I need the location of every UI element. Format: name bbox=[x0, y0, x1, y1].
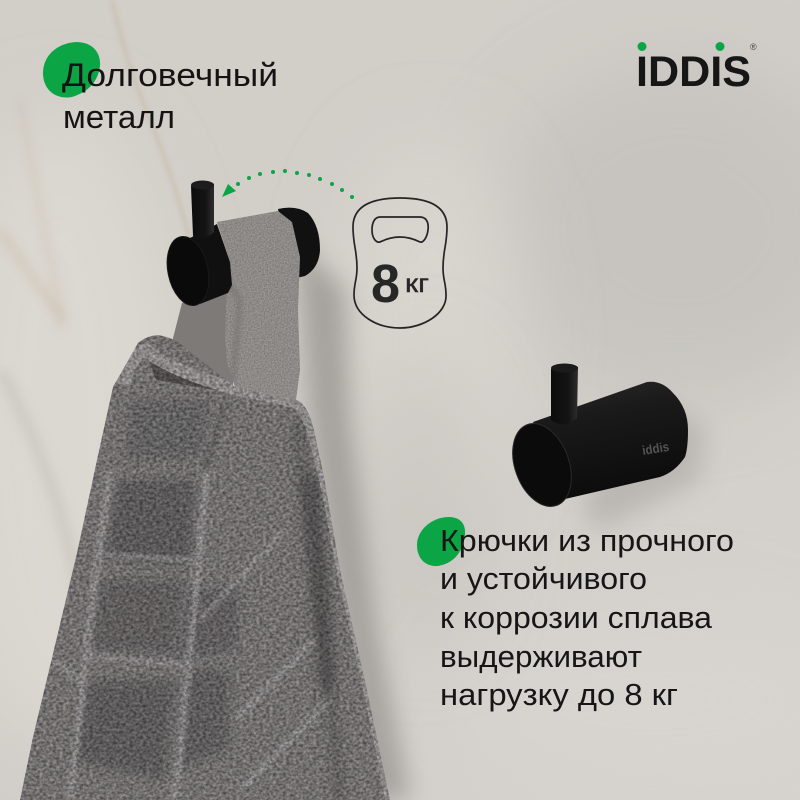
green blob: description bbox=[417, 517, 465, 566]
heading: Долговечный bbox=[62, 57, 278, 93]
hook 2: front disc bbox=[502, 415, 582, 515]
description text bbox=[440, 523, 734, 712]
hook 2 bbox=[502, 364, 688, 515]
heading: металл bbox=[63, 99, 175, 135]
towel bbox=[20, 335, 390, 800]
description text: выдерживают bbox=[440, 639, 642, 674]
towel loop: back strap bbox=[172, 293, 234, 386]
towel strap: front bbox=[217, 211, 300, 400]
description text: нагрузку до 8 кг bbox=[440, 677, 678, 712]
logo: IDDIS: ® bbox=[750, 42, 757, 52]
hook 2: engraved logo: iddis bbox=[641, 439, 670, 458]
description text: Крючки из прочного bbox=[440, 523, 734, 558]
hook 1 with towel strap bbox=[161, 180, 320, 405]
towel: terry squares bbox=[70, 400, 335, 780]
hook 1: body bbox=[190, 224, 232, 304]
weight icon: kettlebell 8 kg bbox=[353, 198, 447, 328]
weight icon: kettlebell 8 kg: кг bbox=[405, 268, 429, 298]
description text: к коррозии сплава bbox=[440, 600, 713, 635]
hook 2: pin bbox=[551, 364, 578, 425]
towel: dark inner fold bbox=[149, 360, 219, 391]
towel: light woven bands bbox=[40, 470, 330, 800]
heading bbox=[62, 57, 278, 135]
hook 2: body bbox=[533, 382, 688, 499]
logo: IDDIS: IDDIS bbox=[636, 48, 751, 96]
hook 1: back end bbox=[278, 208, 320, 279]
description text: и устойчивого bbox=[440, 561, 647, 596]
towel: lip and selvedge bbox=[124, 350, 392, 800]
shadow: towel and hook on wall bbox=[296, 240, 705, 800]
green blob: heading bbox=[43, 42, 100, 98]
hook 1: pin bbox=[191, 180, 214, 238]
hook 1: front disc bbox=[161, 233, 215, 309]
weight icon: kettlebell 8 kg: 8 bbox=[371, 254, 400, 314]
green dotted arrow bbox=[222, 169, 354, 199]
